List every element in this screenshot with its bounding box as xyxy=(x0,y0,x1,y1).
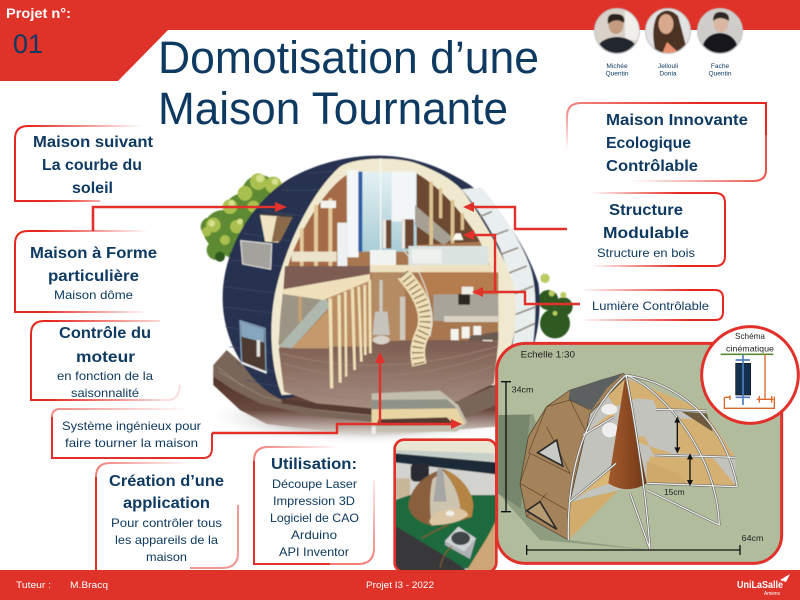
dimension 64cm: 64cm xyxy=(742,533,763,543)
model shadow xyxy=(498,414,650,550)
arrow: structure xyxy=(463,202,567,229)
trench detail xyxy=(372,391,467,434)
callout: Contrôle du moteur xyxy=(31,321,180,400)
title xyxy=(158,32,539,134)
arrow: soleil xyxy=(93,202,287,231)
upper floor and balustrade xyxy=(370,246,492,272)
callout: Maison à forme particulière: Maison à Forme xyxy=(30,245,157,262)
callout: maison innovante: Maison Innovante xyxy=(606,112,748,129)
team names: Michée xyxy=(606,63,628,70)
glazed band xyxy=(462,187,535,350)
dimension arrowheads xyxy=(674,417,693,486)
central cone xyxy=(608,377,647,489)
portrait: Fache Quentin xyxy=(697,8,743,54)
callout: Maison à forme particulière: particulière xyxy=(48,268,139,285)
model interior xyxy=(568,377,737,540)
wall and windows xyxy=(396,454,495,570)
callout: Contrôle du moteur: en fonction de la xyxy=(57,369,153,383)
project number: 01 xyxy=(13,29,43,59)
callout: utilisation: Logiciel de CAO xyxy=(270,511,359,525)
curtains xyxy=(347,158,417,257)
callout: création d'une application: application xyxy=(123,495,210,512)
fireplace xyxy=(373,280,390,344)
callout: système ingénieux: Système ingénieux pour xyxy=(62,419,201,433)
callout: Maison suivant la courbe du soleil: La courbe du xyxy=(42,157,142,174)
illustration: cutaway dome house xyxy=(201,156,573,445)
title: Domotisation d’une xyxy=(158,32,539,83)
callout: création d'une application: Pour contrôler tous xyxy=(111,516,222,530)
callout: système ingénieux: faire tourner la maison xyxy=(65,436,198,450)
logo: UniLaSalle: Amiens xyxy=(764,591,780,597)
callout: Maison à forme particulière: Maison dôme xyxy=(54,288,133,302)
callout: utilisation: API Inventor xyxy=(279,545,349,559)
callout: utilisation: Utilisation: xyxy=(271,456,357,473)
callout: Maison suivant la courbe du soleil: Maison suivant xyxy=(33,134,154,151)
table and floor xyxy=(395,495,496,568)
dome prototype xyxy=(408,469,473,526)
arrow: lumière xyxy=(463,230,580,304)
model ribs xyxy=(568,375,737,549)
footer: tutor: Tuteur : xyxy=(16,580,51,590)
callout: utilisation: Impression 3D xyxy=(273,494,355,508)
portrait: Michée Quentin xyxy=(594,8,640,54)
right upper wall xyxy=(415,173,480,245)
lower wall and kitchen xyxy=(372,272,499,352)
callout: maison innovante: Contrôlable xyxy=(606,158,698,175)
scale label: Echelle 1:30 xyxy=(521,349,575,359)
callout: lumière contrôlable: Lumière Contrôlable xyxy=(592,299,709,313)
callout: création d'une application: maison xyxy=(146,550,187,564)
callout: utilisation: Découpe Laser xyxy=(272,477,357,491)
callout: Contrôle du moteur: saisonnalité xyxy=(71,386,139,400)
interior back wall xyxy=(279,173,498,392)
callout: Contrôle du moteur: moteur xyxy=(76,349,135,366)
panel: photo of prototype xyxy=(395,440,496,572)
callout: utilisation: Arduino xyxy=(291,528,337,542)
callout: utilisation xyxy=(254,447,374,564)
skylight xyxy=(241,213,293,269)
footer band xyxy=(0,570,800,600)
dimension lines xyxy=(501,382,740,555)
callout: lumière contrôlable xyxy=(580,290,723,320)
cream arch frame xyxy=(271,159,516,395)
panel: scale model xyxy=(497,327,798,563)
header band xyxy=(0,0,800,81)
logo: UniLaSalle xyxy=(737,574,790,597)
circular deck xyxy=(213,350,500,437)
team names: Donia xyxy=(659,70,677,78)
arrow: système de rotation xyxy=(212,352,462,433)
callout: Maison suivant la courbe du soleil xyxy=(15,126,154,201)
callout: création d'une application: Création d’une xyxy=(109,473,224,490)
team names: Jellouli xyxy=(658,63,679,70)
team names: Quentin xyxy=(708,70,732,78)
team portraits xyxy=(593,7,744,54)
callout: Contrôle du moteur: Contrôle du xyxy=(59,325,151,342)
portrait: Jellouli Donia xyxy=(645,8,691,54)
team names xyxy=(605,63,732,78)
lower window xyxy=(240,321,267,373)
portrait rings xyxy=(594,8,742,54)
footer: tutor xyxy=(16,580,108,590)
spiral staircase xyxy=(403,250,431,365)
team names: Fache xyxy=(711,63,729,70)
footer: project: Projet I3 - 2022 xyxy=(366,580,434,590)
panel background xyxy=(497,343,782,563)
inset: kinematic diagram xyxy=(702,327,798,423)
upper left room xyxy=(283,175,370,290)
logo: UniLaSalle: UniLaSalle xyxy=(737,579,783,591)
callout: maison innovante: Ecologique xyxy=(606,135,691,152)
photo frame xyxy=(395,440,496,572)
dimension 34cm: 34cm xyxy=(512,385,533,395)
callout: structure modulable xyxy=(590,193,725,266)
inset: kinematic diagram: cinématique xyxy=(726,344,774,354)
ground floor xyxy=(279,340,498,408)
callout: système ingénieux xyxy=(52,409,212,458)
trees xyxy=(201,173,573,338)
ground shadow xyxy=(203,388,523,445)
callout: structure modulable: Structure xyxy=(609,202,683,219)
model shell xyxy=(520,373,627,540)
callout: Maison suivant la courbe du soleil: soleil xyxy=(72,180,113,197)
power supply xyxy=(445,527,476,559)
title: Maison Tournante xyxy=(158,83,508,134)
insulation and stud wall xyxy=(278,274,372,388)
team names: Quentin xyxy=(605,70,629,78)
callout: Maison à forme particulière xyxy=(15,231,157,312)
inset: kinematic diagram: Schéma xyxy=(735,331,765,341)
project number label: Projet n°: xyxy=(6,6,71,21)
callout: maison innovante xyxy=(567,103,766,181)
callout: structure modulable: Structure en bois xyxy=(597,246,695,260)
callout: structure modulable: Modulable xyxy=(603,225,689,242)
dome shell xyxy=(223,156,540,399)
dimension 15cm: 15cm xyxy=(664,487,685,497)
footer: tutor: M.Bracq xyxy=(70,580,108,590)
callout: création d'une application xyxy=(96,463,238,570)
callout: création d'une application: les appareils de la xyxy=(115,533,218,547)
